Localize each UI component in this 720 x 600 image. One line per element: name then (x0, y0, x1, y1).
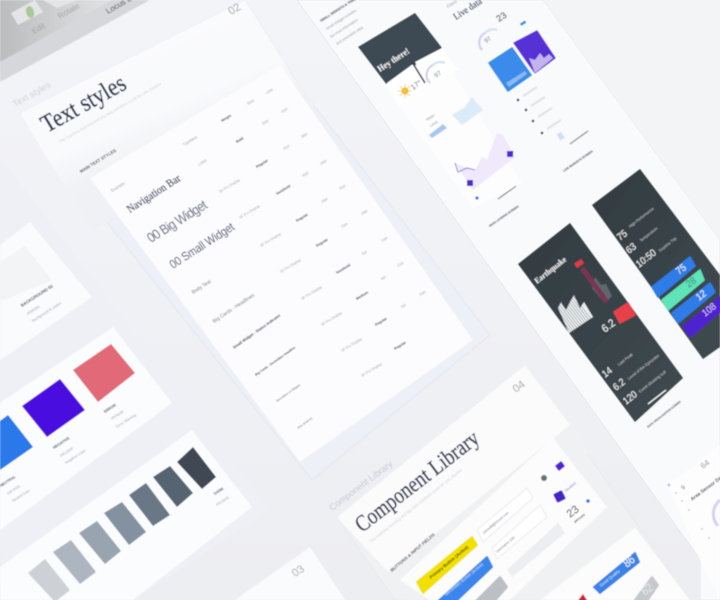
input: password: Username 100 (495, 536, 516, 554)
text: small widgets and table: and actionable data (335, 26, 364, 46)
value: 63: 63 (624, 241, 639, 257)
card: buttons and inputs (400, 438, 607, 600)
card: main text styles (90, 65, 473, 462)
row: navigation bar: Bold (235, 136, 244, 144)
row text: Temperature (639, 226, 658, 243)
input: password (492, 505, 547, 559)
heading: hey there: Hey there! (375, 45, 412, 74)
table header (110, 86, 275, 193)
phone: earthquake (518, 223, 683, 422)
row: small widget: Semibold (275, 184, 291, 196)
card: blue 12 (672, 283, 715, 323)
card: backgrounds: Background & Layers (31, 301, 63, 323)
value: 120: 120 (621, 389, 640, 408)
row: secondary headline: Big Cards - Secondary Headline (254, 345, 296, 377)
row: area small kit: Regular (393, 340, 407, 351)
dot (475, 196, 479, 200)
row: big cards headlines: Big Cards - Headlines (212, 292, 256, 325)
card: colours: Negative Color (64, 448, 87, 465)
row text (628, 207, 677, 253)
row: description on widgets: 5pt (400, 303, 407, 309)
subtitle: The machine learning and big data solutions could be one pipeline (369, 467, 464, 544)
button: secondary (435, 557, 492, 600)
card: backgrounds (0, 222, 92, 360)
row: small widget status: 8pt (361, 250, 368, 256)
row: big widget: 38pt (300, 132, 309, 139)
row: big widget (144, 132, 309, 246)
value: 9: 9 (681, 484, 687, 492)
row: big cards headlines: 20pt (340, 222, 349, 229)
widget: gauge (415, 48, 458, 84)
gauge (479, 29, 497, 50)
chart: pale blue (452, 97, 483, 125)
widget: weather (387, 64, 428, 106)
row: body text: SF Pro Display (259, 232, 282, 248)
row: big cards headlines: SF Pro Display (279, 258, 302, 274)
text: small widgets and table: Small Widget includes (325, 8, 357, 31)
row: small widget: SF Pro Display (238, 204, 261, 220)
row: small widget: 26pt (319, 159, 328, 166)
label: main text styles: MAIN TEXT STYLES (79, 148, 117, 174)
panel: text styles page (11, 0, 490, 480)
row: body text: 22pt (338, 184, 347, 191)
text: small widgets and table (319, 0, 364, 46)
row: small widget status (232, 236, 389, 350)
mini bars (557, 132, 565, 140)
value: 23 percent (565, 503, 587, 524)
card: purple 108 (683, 297, 720, 337)
phone: dashboard (592, 169, 720, 359)
badge: grey status (541, 475, 547, 481)
row: big widget: 00 Big Widget (144, 197, 210, 246)
button: disabled (473, 577, 507, 600)
row: small widget status: SF Pro Display (300, 285, 323, 301)
row: body text: Body Text (191, 279, 213, 296)
page number 02: 02 (226, 2, 243, 17)
toggle (520, 21, 526, 26)
row: navigation bar: 41pt (280, 107, 289, 114)
row: small widget status: Semibold (335, 263, 351, 275)
card: blue (489, 48, 531, 91)
row: description on widgets: 10pt (418, 290, 427, 297)
pill: red (575, 260, 583, 267)
row: navigation bar (125, 107, 289, 216)
button: secondary: Secondary Button (Active) (443, 561, 485, 597)
row: area small kit: Area Small Kit (296, 416, 313, 430)
value: 1050: 10:50 (634, 247, 659, 271)
swatch: neutral (0, 415, 33, 470)
phone: landing (358, 13, 522, 208)
row: body text (191, 184, 347, 296)
row text: Level of the Epicenter (627, 352, 661, 381)
chart: traffic (455, 133, 515, 190)
row: big cards headlines: Regular (315, 237, 329, 248)
row text: Last Peak (617, 352, 634, 367)
row: big widget: Regular (255, 158, 269, 169)
row: secondary headline: SF Pro Display (320, 311, 343, 327)
chart: white bars (558, 295, 593, 333)
home bar (648, 390, 666, 404)
toolbar (0, 0, 151, 82)
panel: right margin (543, 0, 720, 240)
widget: blue air quality: 86 (621, 553, 638, 571)
panel: screens page background (297, 0, 720, 600)
value: 14: 14 (600, 365, 615, 381)
icon: red (577, 594, 588, 600)
badge: purple large (555, 481, 577, 501)
widget: grey (632, 577, 658, 600)
row: big cards headlines: 28pt (360, 209, 369, 216)
label: background 02: BACKGROUND 02 (20, 283, 54, 308)
card: blue 75: 75 (674, 262, 689, 278)
page number 04: 04 (511, 378, 528, 395)
dot (586, 499, 590, 503)
value: 75: 75 (615, 228, 630, 244)
label: buttons and input fields: BUTTONS & INPUT FIELDS (390, 532, 436, 573)
row: area small kit: SF Pro Display (360, 362, 383, 378)
badge: purple large: Disabled (564, 481, 577, 493)
text: small widgets and table: the most information (329, 18, 359, 39)
text: water: Level (429, 120, 439, 128)
row: big cards headlines (212, 209, 369, 325)
row: big widget: 41pt (282, 144, 291, 151)
swatch: error (73, 344, 135, 402)
card: colours: Error, Warning (115, 413, 137, 429)
card: backgrounds: #F8F8FA (26, 304, 42, 316)
page number 64: 64 (699, 458, 712, 471)
text: water (425, 113, 439, 128)
table header: Typeface (182, 134, 199, 147)
home bar (498, 186, 516, 199)
label: dark: DARK (213, 487, 225, 496)
row: navigation bar: 32pt (261, 119, 270, 126)
text: water: Water (425, 113, 436, 122)
icon: sun (398, 84, 412, 98)
value: 6.2 row: 6.2 (611, 376, 628, 394)
label: data visualisation screen: DATA VISUALISATION SCREEN (646, 400, 682, 429)
card: widgets (540, 528, 690, 600)
heading: component library: Component Library (350, 425, 484, 537)
panel: colours (0, 157, 270, 600)
phone: live data (446, 0, 588, 144)
row: secondary headline (254, 261, 405, 377)
table header: Size (246, 97, 256, 106)
badge: purple small (556, 462, 564, 470)
row: navigation bar: Navigation Bar (125, 173, 184, 216)
card: colours: Neutral Data (11, 489, 31, 503)
card: purple (514, 31, 555, 73)
list (517, 99, 543, 134)
value: 23: 23 (494, 10, 509, 24)
label: component library: Component Library (327, 458, 395, 513)
swatch: negative (22, 379, 85, 437)
row: big widget: SF Pro Display (218, 178, 241, 194)
input: disabled (507, 523, 565, 577)
card: blue 75 (652, 257, 695, 297)
card: blue 12: 12 (694, 288, 709, 304)
row: description on widgets: Description on Widgets (275, 383, 302, 403)
toolbar label: Rotate: Rotate (56, 1, 82, 21)
row: description on widgets: SF Pro Display (340, 337, 363, 353)
button: primary: Primary Button (Active) (428, 544, 470, 580)
row: secondary headline: 6pt (380, 275, 387, 281)
input: email (477, 488, 533, 542)
button: primary (417, 537, 477, 593)
screens page content (319, 0, 720, 600)
row: secondary headline: 12pt (396, 261, 405, 268)
list lines (523, 87, 561, 129)
subtitle: The machine learning and big data solutions could be one pipeline (58, 81, 163, 144)
panel: page 03 stub (235, 547, 345, 600)
row: small widget (168, 159, 328, 272)
panel: page 03 stub: 03 (290, 563, 307, 579)
label: negative: NEGATIVE (52, 436, 71, 450)
heading: text styles: Text styles (36, 70, 131, 139)
toolbar label: Edit: Edit (30, 21, 48, 36)
gauge: 97 (484, 36, 493, 45)
label: text styles: Text styles (11, 80, 53, 109)
panel: component library page (327, 365, 690, 600)
row: small widget status: 14pt (380, 236, 389, 243)
input: email: johnwill@icloud.com (481, 511, 510, 535)
label: live markets screen: LIVE MARKETS SCREEN (562, 149, 594, 173)
card: purple 108: 108 (700, 301, 719, 320)
card: teal 28 (662, 270, 704, 310)
label: main landing screen: MAIN LANDING SCREEN (488, 204, 520, 228)
card: colours: #FF5A5F (110, 409, 126, 421)
row: small widget status: Small Widget - Status Indicator (232, 312, 282, 350)
table header: Example (110, 180, 126, 193)
row: description on widgets (275, 290, 427, 403)
bar: blue (429, 124, 447, 138)
widget: blue air quality: Good Quality (598, 568, 621, 588)
widget: gauge: 97 (433, 70, 444, 80)
widget: blue air quality (594, 553, 639, 593)
home bar (570, 131, 588, 144)
dots (668, 484, 710, 539)
button: red (614, 303, 635, 323)
widget: grey: 62 (639, 581, 656, 599)
gauge (713, 500, 720, 526)
row: small widget: 40pt (301, 171, 310, 178)
card: greys (0, 430, 252, 600)
text: 17 degrees: 17° (409, 78, 424, 92)
table header: Line (265, 86, 275, 95)
chart: pink bar (582, 268, 607, 302)
widget gap (412, 62, 425, 83)
row: body text: Regular (295, 212, 309, 223)
icon: edit tile (11, 0, 43, 25)
value: 23 percent: percent (573, 512, 587, 524)
row: navigation bar: LORA (197, 158, 208, 167)
chart: bar gaps (549, 290, 591, 332)
icon: rotate tile (43, 0, 77, 8)
row: small widget: 00 Small Widget (168, 221, 238, 272)
value: 23 percent: 23 (565, 503, 582, 520)
card: area sensor data (668, 445, 720, 600)
row: description on widgets: Regular (374, 316, 388, 327)
heading: earthquake: Earthquake (533, 254, 568, 286)
label: error: ERROR (103, 403, 117, 414)
header (358, 13, 442, 84)
card: colours (0, 327, 172, 530)
row: area small kit (296, 340, 407, 430)
card: teal 28: 28 (684, 275, 699, 291)
row text (617, 352, 667, 394)
row text: Event showing soil (638, 369, 667, 394)
row text: High Performance (628, 207, 655, 229)
chart: dark bars (592, 277, 612, 303)
row text: Daytime Trip (658, 236, 677, 253)
value: 6.2: 6.2 (599, 317, 618, 336)
row: secondary headline: Medium (355, 291, 369, 301)
row: body text: 16pt (320, 197, 329, 204)
card: colours: #3F7FEE (6, 484, 22, 496)
card: greys: #3C4A52 (215, 496, 230, 507)
card: colours: #4C22DF (59, 446, 75, 458)
table header: Weight (220, 113, 233, 123)
